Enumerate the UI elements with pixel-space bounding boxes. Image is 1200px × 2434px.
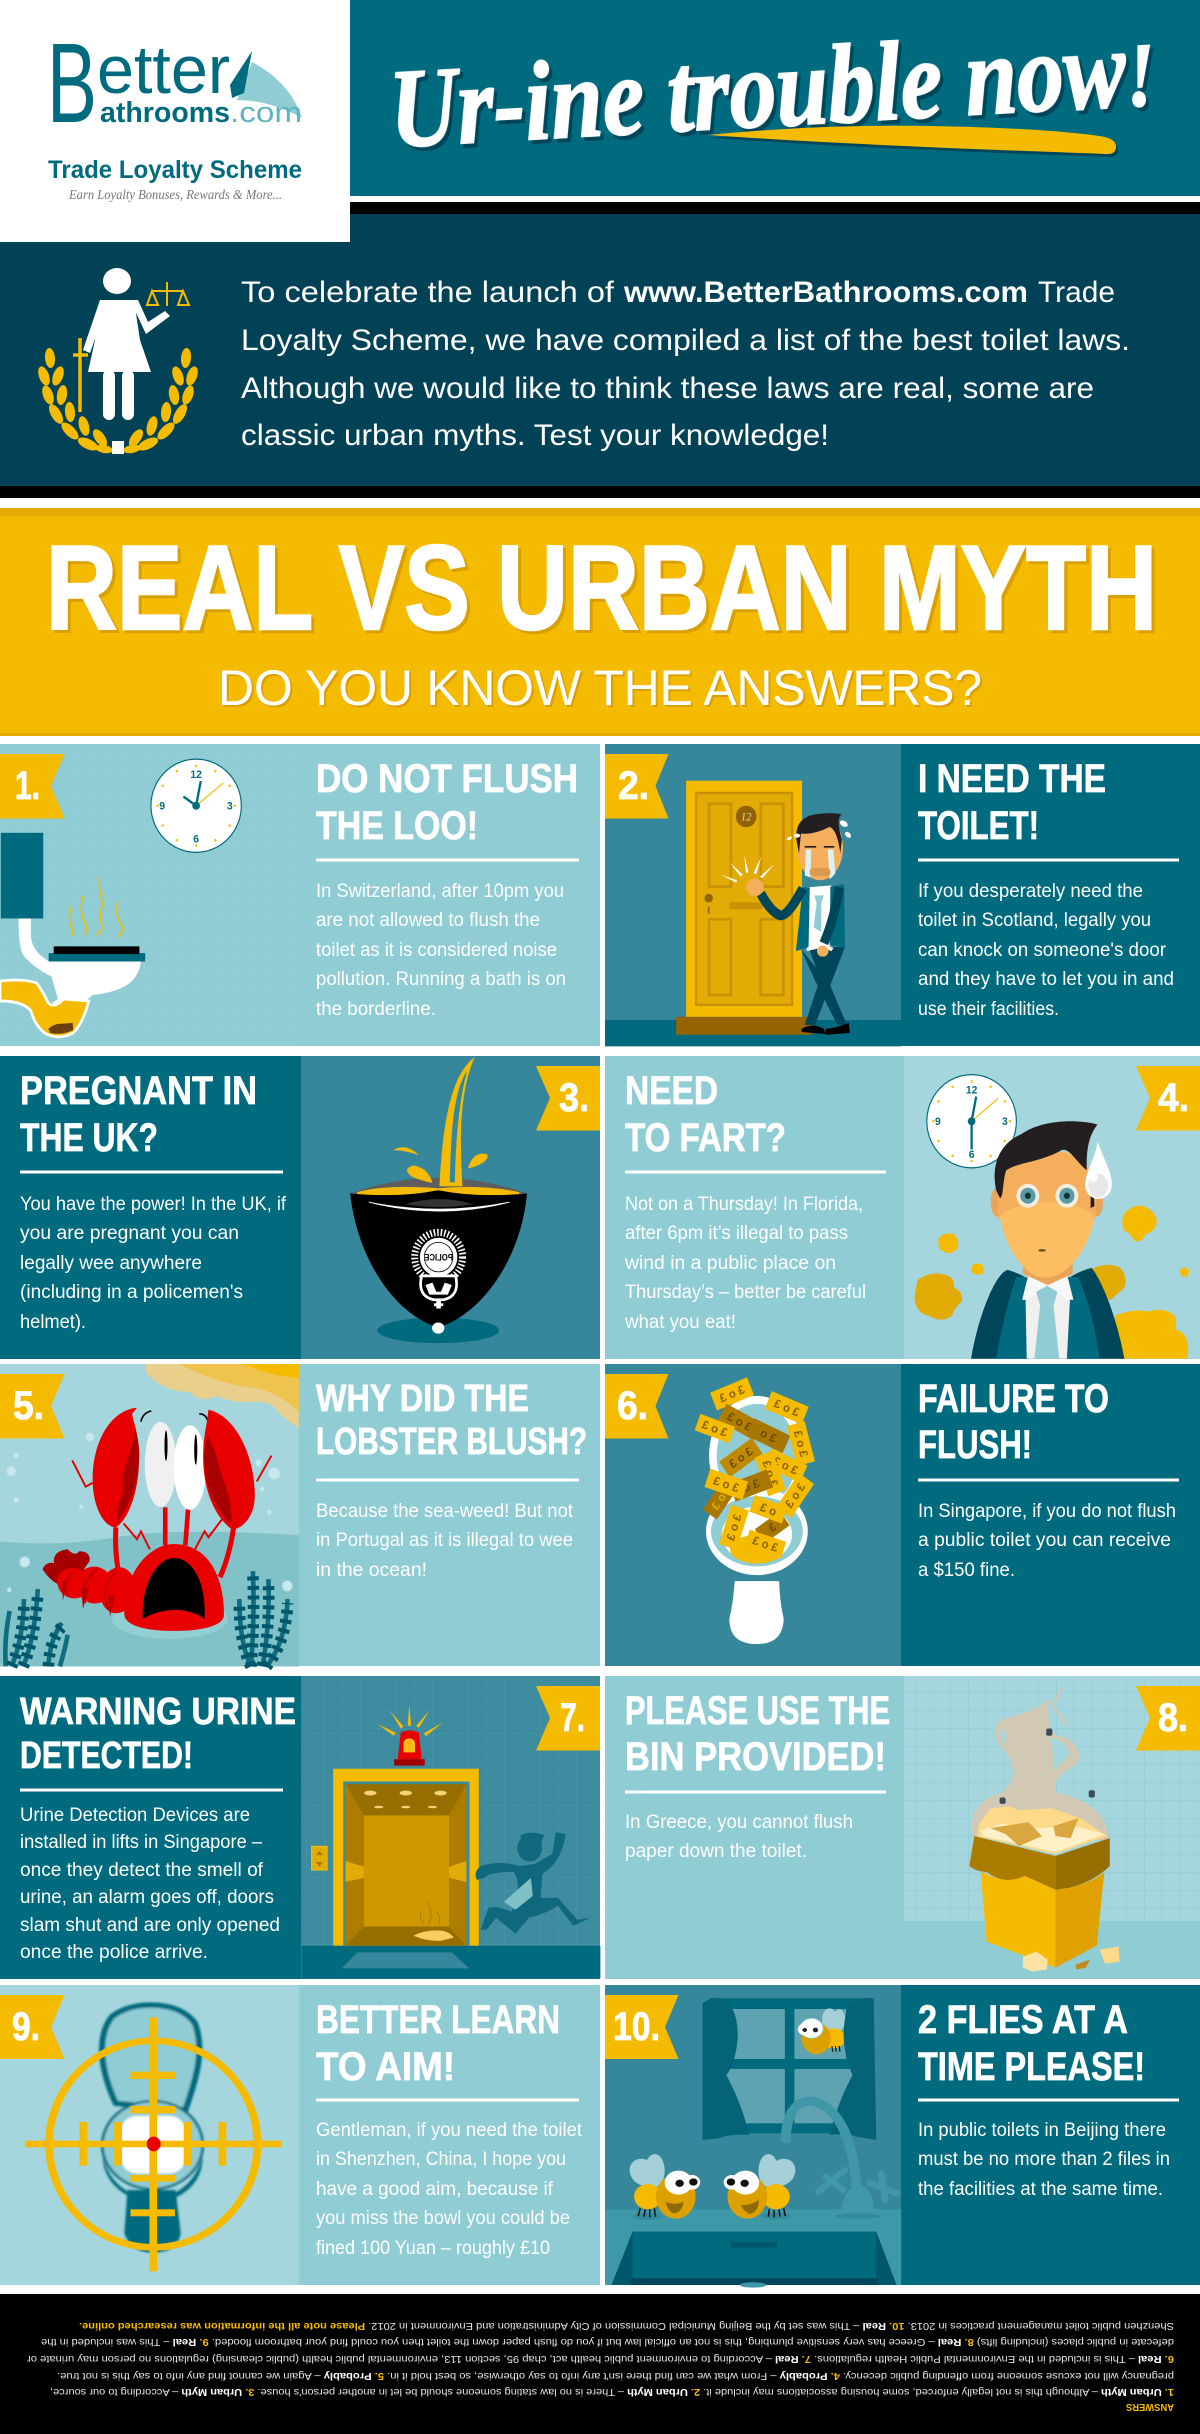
intro text: Although we would like to think these laws are real, some are	[241, 372, 1094, 405]
body text: a $150 fine.	[918, 1560, 1015, 1581]
icon: fly at the window	[798, 2008, 846, 2054]
body text: what you eat!	[624, 1312, 736, 1333]
heading: need to fart	[625, 1069, 886, 1174]
icon: lift buttons	[312, 1846, 327, 1870]
body text: toilet in Scotland, legally you	[918, 910, 1151, 931]
ribbon: number 8	[1136, 1686, 1200, 1750]
ribbon: number 7	[536, 1686, 600, 1750]
icon: banknotes: o £	[758, 1426, 779, 1446]
heading: i need the toilet: TOILET!	[918, 804, 1039, 848]
icon: clock: 9	[935, 1116, 941, 1128]
icon: police badge: POLICE	[424, 1252, 453, 1262]
icon: clock: 3	[227, 801, 233, 813]
panel 6: failure to flush	[605, 1364, 1200, 1666]
body text: Because the sea-weed! But not	[316, 1501, 574, 1522]
illustration: flies in a bathroom	[605, 1998, 901, 2288]
heading: i need the toilet	[918, 757, 1179, 862]
heading: i need the toilet: I NEED THE	[918, 757, 1106, 801]
body text	[624, 1194, 866, 1333]
panel 2: i need the toilet	[605, 744, 1200, 1046]
heading: please use the bin provided	[625, 1689, 890, 1794]
ribbon: number 6: 6.	[617, 1384, 648, 1428]
body text: In Greece, you cannot flush	[625, 1812, 853, 1833]
body text: can knock on someone's door	[918, 940, 1167, 961]
icon: banknotes: £ o £	[771, 1454, 800, 1478]
ribbon: number 7: 7.	[560, 1696, 585, 1740]
icon: banknotes: £ o £	[700, 1418, 730, 1440]
ribbon: number 1	[0, 754, 64, 818]
body text	[20, 1805, 280, 1963]
body text: pollution. Running a bath is on	[316, 969, 566, 990]
body text: Gentleman, if you need the toilet	[316, 2120, 583, 2141]
heading: 2 flies at a time please	[918, 1998, 1179, 2102]
ribbon: number 8: 8.	[1158, 1696, 1188, 1740]
answers text block: defecate in public places (including lifts) 8. Real – Greece has very sensitive plumbing, this is not an official law but if you do flush paper down the toilet then you could find your bathroom flooded. 9. Real – This was included in the	[41, 2336, 1174, 2348]
icon: banknotes: £	[766, 1520, 779, 1535]
body text: In public toilets in Beijing there	[918, 2120, 1166, 2141]
body text: Thursday’s – better be careful	[625, 1282, 866, 1303]
illustration: overflowing paper bin	[969, 1689, 1120, 1972]
intro text: classic urban myths. Test your knowledge!	[241, 419, 829, 452]
panel 4: need to fart	[605, 1056, 1200, 1359]
icon: police badge	[415, 1232, 463, 1309]
answers text block: ANSWERS	[1126, 2401, 1174, 2413]
heading: pregnant in the uk	[20, 1069, 283, 1174]
answers text block: 6. Real – This is included in the Environmental Public Health regulations. 7. Real – According to environment public health act, chap 95, section 113, environmental public health (public cleansing) regulations no person may urinate or	[26, 2353, 1174, 2365]
body text: once they detect the smell of	[20, 1860, 264, 1881]
body text: use their facilities.	[918, 999, 1059, 1020]
icon: banknotes: £ o £	[718, 1383, 747, 1405]
ribbon: number 3: 3.	[559, 1076, 589, 1120]
answers text block: pregnancy will not excuse someone from offending public decency. 4. Probably – From what we can find there isn't any info to say otherwise, so best hold it in. 5. Probably – Again we cannot find any info to say this is not true.	[57, 2370, 1174, 2382]
heading: please use the bin provided: BIN PROVIDED!	[625, 1735, 886, 1779]
intro text: Loyalty Scheme, we have compiled a list of the best toilet laws.	[241, 324, 1130, 357]
illustration: toilet full of banknotes	[695, 1377, 815, 1644]
body text: have a good aim, because if	[316, 2179, 554, 2200]
body text: helmet).	[20, 1312, 86, 1333]
ribbon: number 2	[605, 754, 668, 818]
panel 7: warning urine detected	[0, 1676, 600, 1979]
heading: 2 flies at a time please: 2 FLIES AT A	[918, 1998, 1128, 2042]
icon: banknotes: £ o £	[783, 1480, 808, 1511]
body text	[918, 2120, 1170, 2200]
ribbon: number 5: 5.	[13, 1384, 44, 1428]
body text: a public toilet you can receive	[918, 1530, 1171, 1551]
heading: warning urine detected: WARNING URINE	[20, 1691, 296, 1733]
logo: Better Bathrooms: B	[47, 20, 97, 146]
body text	[20, 1194, 287, 1333]
icon: banknotes: £ o	[709, 1491, 729, 1513]
icon: clock: 12	[190, 769, 202, 781]
icon: clock: 12	[966, 1084, 977, 1096]
answers text block	[26, 2320, 1174, 2413]
heading: failure to flush	[918, 1377, 1179, 1482]
icon: clock: 6	[969, 1149, 975, 1161]
ribbon: number 5	[0, 1374, 64, 1438]
body text: are not allowed to flush the	[316, 910, 540, 931]
logo tagline: Earn Loyalty Bonuses, Rewards & More...	[68, 188, 282, 203]
heading: need to fart: TO FART?	[625, 1116, 786, 1160]
panel 10: 2 flies at a time please	[605, 1985, 1200, 2288]
body text: in Shenzhen, China, I hope you	[316, 2149, 566, 2170]
body text: urine, an alarm goes off, doors	[20, 1887, 274, 1908]
icon: running man silhouette	[476, 1832, 591, 1934]
heading: better learn to aim	[316, 1998, 579, 2102]
body text: the facilities at the same time.	[918, 2179, 1163, 2200]
body text: (including in a policemen's	[20, 1282, 243, 1303]
icon: banknotes: £ o £	[724, 1512, 745, 1542]
heading: pregnant in the uk: PREGNANT IN	[20, 1069, 257, 1113]
heading: warning urine detected	[20, 1691, 296, 1792]
intro text: Trade	[1038, 276, 1115, 309]
icon: banknotes: £ o £	[791, 1429, 810, 1459]
icon: crosshair	[25, 2017, 281, 2271]
heading: warning urine detected: DETECTED!	[20, 1735, 193, 1777]
logo: Better Bathrooms: athrooms	[100, 97, 230, 129]
heading: 2 flies at a time please: TIME PLEASE!	[918, 2045, 1145, 2089]
body text: and they have to let you in and	[918, 969, 1174, 990]
ribbon: number 2: 2.	[618, 764, 649, 808]
body text: In Switzerland, after 10pm you	[316, 881, 564, 902]
icon: right fly	[724, 2154, 800, 2219]
icon: seaweed	[5, 1571, 288, 1666]
body text: In Singapore, if you do not flush	[918, 1501, 1176, 1522]
body text: You have the power! In the UK, if	[20, 1194, 287, 1215]
icon: banknotes: £ o £	[712, 1474, 741, 1495]
body text: wind in a public place on	[624, 1253, 836, 1274]
logo tagline: Trade Loyalty Scheme	[48, 156, 302, 184]
subheading: do you know the answers: DO YOU KNOW THE ANSWERS?	[218, 660, 982, 716]
title swoosh underline	[708, 126, 1116, 154]
answers text block: 1. Urban Myth – Although this is not legally enforced, some housing associations may include it. 2. Urban Myth – There is no law stating someone should be let in another person's house. 3. Urban Myth – According to our source,	[50, 2386, 1174, 2398]
illustration: man knocking on door: 12	[741, 811, 752, 824]
body text: Not on a Thursday! In Florida,	[625, 1194, 863, 1215]
icon: clock	[151, 759, 241, 852]
heading: better learn to aim: BETTER LEARN	[316, 1998, 560, 2042]
illustration: toilet with clock	[0, 759, 241, 1037]
heading: better learn to aim: TO AIM!	[316, 2045, 455, 2089]
icon: banknotes: £ o £	[759, 1459, 781, 1489]
ribbon: number 1: 1.	[15, 764, 40, 808]
heading: why did the lobster blush: WHY DID THE	[316, 1378, 529, 1420]
heading: please use the bin provided: PLEASE USE THE	[625, 1689, 890, 1733]
body text	[316, 881, 566, 1020]
logo: Better Bathrooms: etter	[97, 32, 230, 108]
heading: why did the lobster blush: LOBSTER BLUSH?	[316, 1421, 587, 1463]
body text: after 6pm it’s illegal to pass	[625, 1223, 848, 1244]
icon: banknotes: £ o £	[772, 1397, 802, 1420]
ribbon: number 3	[536, 1066, 600, 1130]
body text: the borderline.	[316, 999, 436, 1020]
intro text: To celebrate the launch of	[241, 276, 615, 309]
ribbon: number 10	[605, 1995, 678, 2059]
illustration: man knocking on door	[605, 781, 901, 1046]
icon: clock: 6	[193, 833, 199, 845]
icon: banknotes	[695, 1377, 815, 1559]
panel 5: why did the lobster blush	[0, 1364, 600, 1666]
panel 1: do not flush the loo	[0, 744, 600, 1046]
icon: clock: 3	[1002, 1116, 1008, 1128]
body text: paper down the toilet.	[625, 1841, 807, 1862]
body text: legally wee anywhere	[20, 1253, 202, 1274]
answers text block: Shenzhen public toilet management practices in 2013. 10. Real – This was set by the Beijing Municipal Commission of City Administration and Environment in 2012. Please note all the information was researched online.	[79, 2320, 1174, 2332]
heading: why did the lobster blush	[316, 1378, 587, 1482]
body text: once the police arrive.	[20, 1942, 208, 1963]
illustration: toilet in crosshair	[25, 2005, 281, 2271]
icon: clock	[927, 1075, 1016, 1168]
logo: Better Bathrooms	[47, 20, 302, 146]
black band and intro panel	[0, 202, 1200, 498]
heading: failure to flush: FAILURE TO	[918, 1377, 1109, 1421]
ribbon: number 9	[0, 1995, 64, 2059]
body text: toilet as it is considered noise	[316, 940, 557, 961]
heading: failure to flush: FLUSH!	[918, 1423, 1032, 1467]
body text: must be no more than 2 files in	[918, 2149, 1170, 2170]
body text	[918, 1501, 1176, 1581]
yellow banner: real vs urban myth	[0, 508, 1200, 736]
icon: lady justice with laurel	[36, 268, 200, 455]
body text	[316, 2120, 583, 2259]
body text	[625, 1812, 853, 1862]
body text: in Portugal as it is illegal to wee	[316, 1530, 573, 1551]
ribbon: number 6	[605, 1374, 668, 1438]
illustration: urine in police helmet	[350, 1057, 527, 1343]
panel 3: pregnant in the uk	[0, 1056, 600, 1359]
body text	[316, 1501, 574, 1581]
icon: clock: 9	[159, 801, 165, 813]
panel 8: please use the bin provided	[605, 1676, 1200, 1979]
ribbon: number 4	[1136, 1066, 1200, 1130]
body text: fined 100 Yuan – roughly £10	[316, 2238, 550, 2259]
illustration: worried man with clock	[915, 1075, 1189, 1359]
ribbon: number 4: 4.	[1158, 1076, 1189, 1120]
icon: banknotes: £ o £	[727, 1444, 756, 1471]
body text: you are pregnant you can	[20, 1223, 239, 1244]
heading: do not flush the loo	[316, 757, 579, 862]
heading: pregnant in the uk: THE UK?	[20, 1116, 158, 1160]
logo: Better Bathrooms: .com	[230, 97, 302, 129]
heading: do not flush the loo: THE LOO!	[316, 804, 478, 848]
heading: do not flush the loo: DO NOT FLUSH	[316, 757, 578, 801]
body text: If you desperately need the	[918, 881, 1143, 902]
icon: left fly	[625, 2154, 700, 2220]
body text: in the ocean!	[316, 1560, 427, 1581]
ribbon: number 9: 9.	[12, 2005, 40, 2049]
heading: need to fart: NEED	[625, 1069, 718, 1113]
answers footer: upside-down text	[0, 2294, 1200, 2434]
icon: banknotes: £ o £	[725, 1410, 754, 1435]
icon: banknotes: £ o £	[751, 1534, 780, 1555]
icon: tap	[786, 2101, 897, 2219]
icon: alarm siren	[376, 1705, 443, 1766]
body text	[918, 881, 1174, 1020]
logo tagline	[48, 156, 302, 203]
logo panel	[0, 0, 350, 242]
panel 9: better learn to aim	[0, 1985, 600, 2285]
header banner	[350, 0, 1200, 196]
body text: slam shut and are only opened	[20, 1915, 280, 1936]
body text: installed in lifts in Singapore –	[20, 1832, 262, 1853]
icon: banknotes: o £	[741, 1477, 762, 1495]
ribbon: number 10: 10.	[613, 2005, 660, 2049]
body text: you miss the bowl you could be	[316, 2208, 570, 2229]
illustration: blushing lobster under the sea	[0, 1364, 299, 1666]
body text: Urine Detection Devices are	[20, 1805, 250, 1826]
illustration: lift with alarm and fleeing man	[302, 1705, 600, 1979]
intro text: www.BetterBathrooms.com	[623, 276, 1028, 309]
icon: banknotes: £ o	[758, 1501, 778, 1519]
intro text	[241, 276, 1130, 452]
